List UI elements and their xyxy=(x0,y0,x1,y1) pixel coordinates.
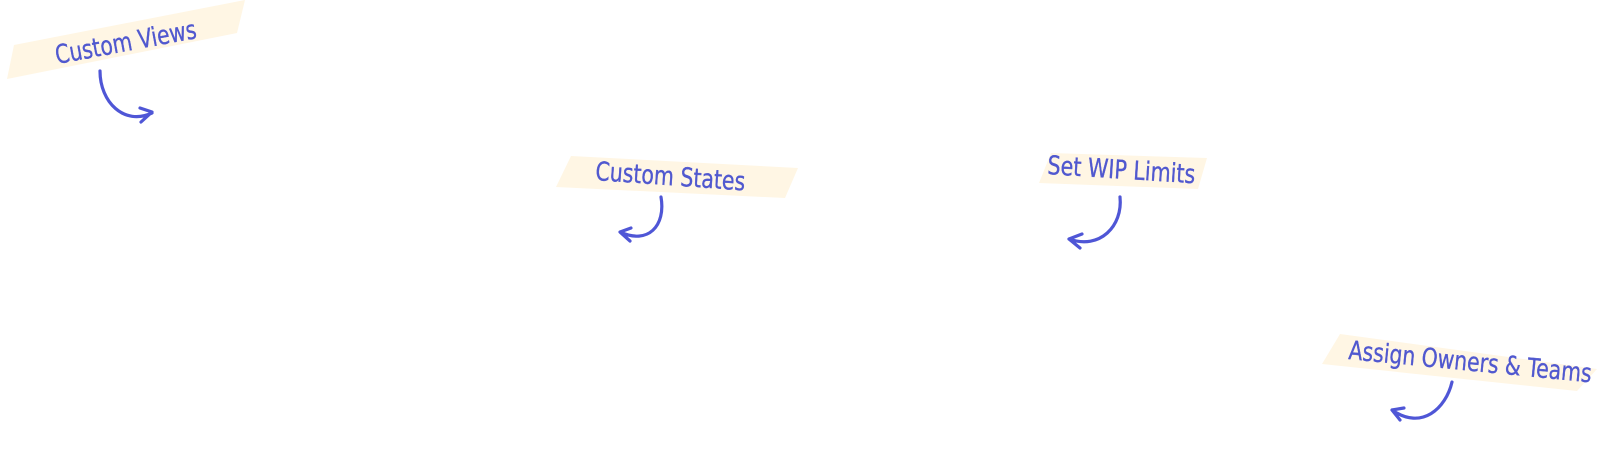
tape: Assign Owners & Teams xyxy=(1322,334,1597,391)
annotation: Assign Owners & Teams xyxy=(1322,334,1597,420)
label: Custom States: Custom States xyxy=(595,157,746,197)
tape: Custom Views xyxy=(7,0,245,79)
label: Set WIP Limits: Set WIP Limits xyxy=(1047,151,1196,190)
annotation: Custom Views xyxy=(7,0,245,122)
arrow: Set WIP Limits xyxy=(1069,197,1120,248)
annotation: Set WIP Limits xyxy=(1039,151,1207,248)
arrow: Assign Owners & Teams xyxy=(1392,382,1452,420)
arrow: Custom Views xyxy=(100,71,152,122)
tape: Custom States xyxy=(556,156,798,198)
tape: Set WIP Limits xyxy=(1039,153,1207,189)
annotation: Custom States xyxy=(556,156,798,241)
label: Custom Views: Custom Views xyxy=(53,15,199,71)
arrow: Custom States xyxy=(620,197,662,241)
